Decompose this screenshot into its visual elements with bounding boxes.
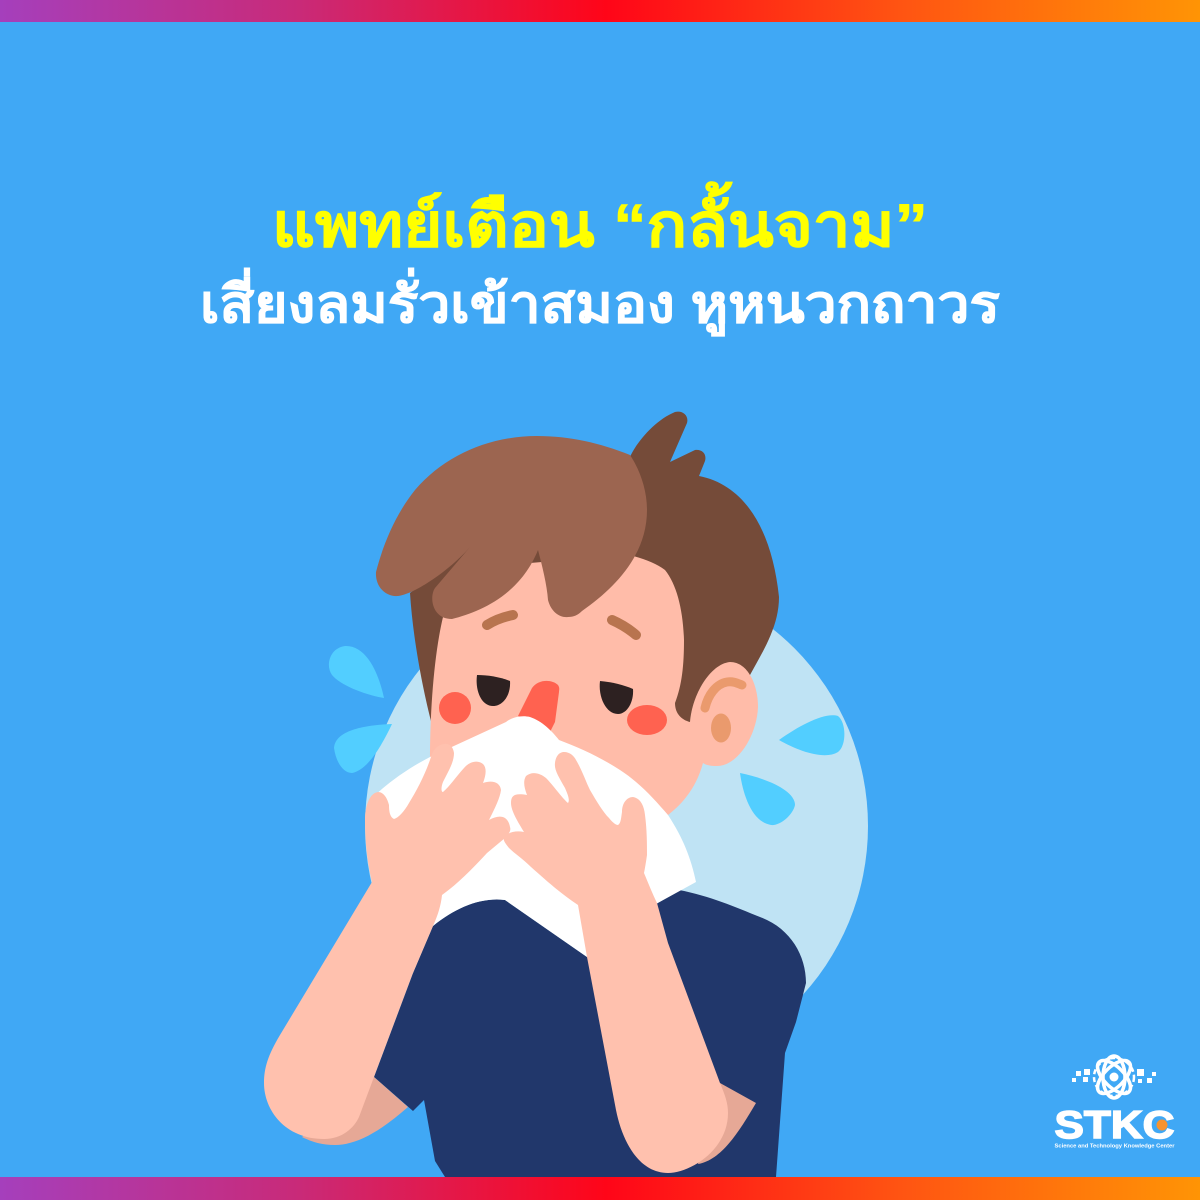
- logo orange dot: [1156, 1120, 1168, 1130]
- logo tagline: Science and Technology Knowledge Center: [1054, 1144, 1175, 1150]
- sweat drops: [329, 646, 844, 825]
- tissue: [370, 716, 696, 957]
- background circle: [365, 574, 868, 1078]
- title: [200, 181, 1000, 337]
- STKC wordmark: STKC: [1054, 1104, 1174, 1147]
- drop lower left: [334, 724, 392, 773]
- face: [430, 556, 712, 815]
- character: [264, 412, 806, 1177]
- STKC logo: [1054, 1055, 1175, 1150]
- left cheek: [439, 692, 471, 724]
- right cheek: [627, 705, 667, 735]
- nose: [518, 681, 559, 732]
- front hair: [376, 436, 647, 619]
- right eyebrow: [612, 620, 636, 635]
- ear inner line: [705, 682, 742, 708]
- bottom gradient bar: [0, 1177, 1200, 1200]
- atom icon: [1092, 1055, 1136, 1099]
- drop top left: [329, 646, 384, 698]
- drop upper right: [779, 715, 844, 755]
- drop lower right: [740, 773, 795, 825]
- right eye: [600, 681, 633, 714]
- left elbow shadow: [302, 1077, 408, 1145]
- ear: [690, 662, 758, 766]
- shirt: [374, 890, 806, 1177]
- right arm and hand: [504, 752, 728, 1173]
- pixel squares: [1072, 1069, 1156, 1083]
- title line 2: เสี่ยงลมรั่วเข้าสมอง หูหนวกถาวร: [200, 268, 1000, 337]
- ear lobe: [711, 714, 731, 742]
- left eyebrow: [487, 615, 513, 625]
- left arm and hand: [264, 744, 510, 1139]
- title line 1: แพทย์เตือน “กลั้นจาม”: [272, 181, 928, 259]
- top gradient bar: [0, 0, 1200, 22]
- right elbow shadow: [698, 1083, 756, 1164]
- left eye: [477, 675, 510, 706]
- back hair: [410, 412, 779, 730]
